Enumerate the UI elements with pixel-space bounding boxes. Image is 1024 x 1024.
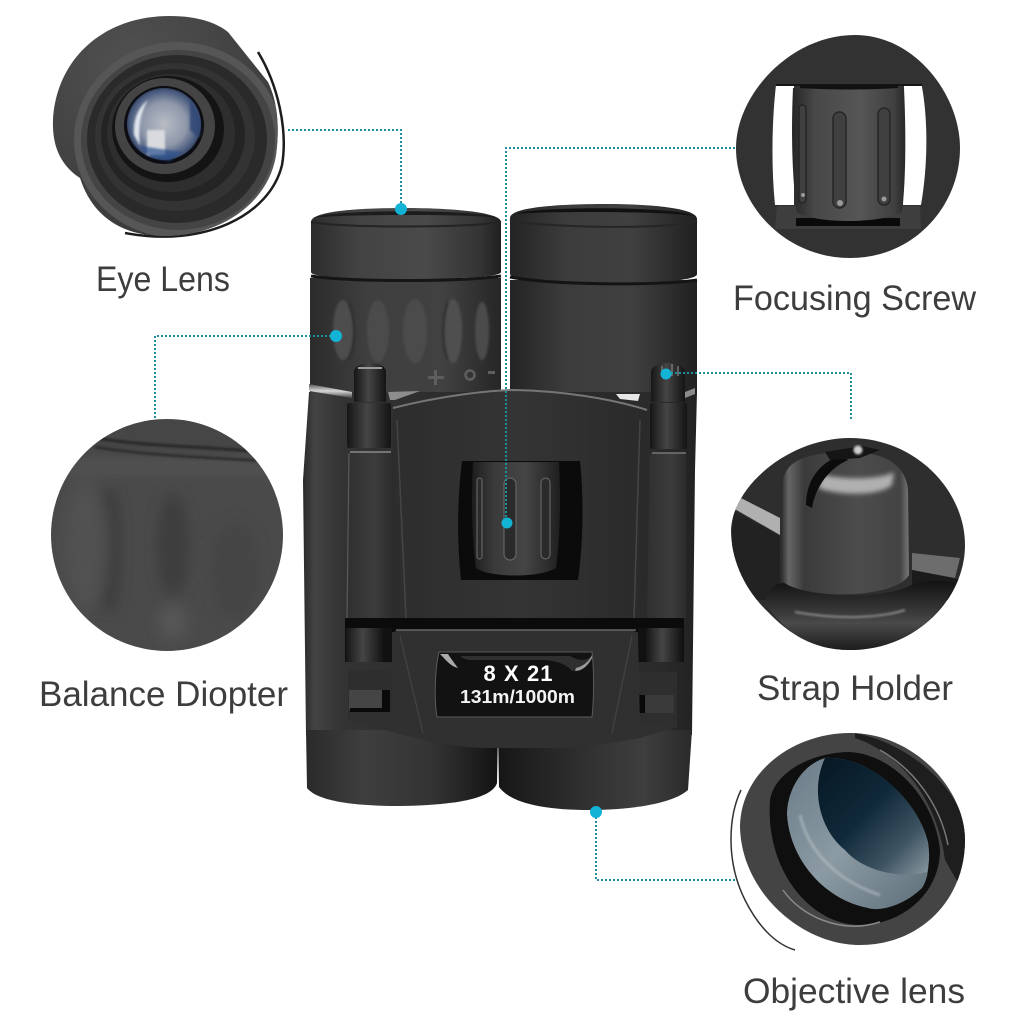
callout: balance diopter connector [155,330,342,418]
upper side plates [347,452,686,618]
focus wheel window [458,461,582,580]
white window gaps [772,85,794,205]
silver bands [309,384,352,398]
left eyecup and diopter ring [310,208,501,392]
centre bridge plate [393,390,647,618]
label: Focusing Screw: Focusing Screw [733,279,977,318]
right eyecup and barrel [510,204,697,395]
panel: focusing screw detail [730,30,965,262]
focus wheel [472,462,560,576]
panel: strap holder detail [728,435,968,653]
callout: objective lens connector [590,806,737,880]
base flange [766,581,955,652]
bottom platform [775,206,921,229]
label: Eye Lens: Eye Lens [96,260,230,299]
label: Strap Holder: Strap Holder [757,669,953,708]
icon: eyepiece glass [124,86,204,164]
label: Objective lens: Objective lens [743,972,965,1011]
panel: eye lens detail [50,10,290,245]
callout: focusing screw connector [502,148,735,528]
panel: objective lens detail [731,730,970,962]
objective barrels [306,730,692,810]
label: Balance Diopter: Balance Diopter [39,675,288,714]
lower hinge plate [345,618,684,748]
silver band left [736,498,780,535]
panel: binoculars product photo [303,204,697,810]
model badge [435,652,594,717]
callout: eye lens connector [288,130,407,215]
panel: balance diopter detail [50,418,286,652]
callout: strap holder connector [660,368,851,420]
model badge: 8 X 21 [484,661,552,686]
icon: objective glass [787,758,929,909]
icon: hinge strap posts [347,363,687,449]
post body [781,452,909,594]
model badge: 131m/1000m [460,686,575,707]
diopter markings [428,370,495,385]
focus wheel [792,85,905,221]
main body [303,392,697,735]
